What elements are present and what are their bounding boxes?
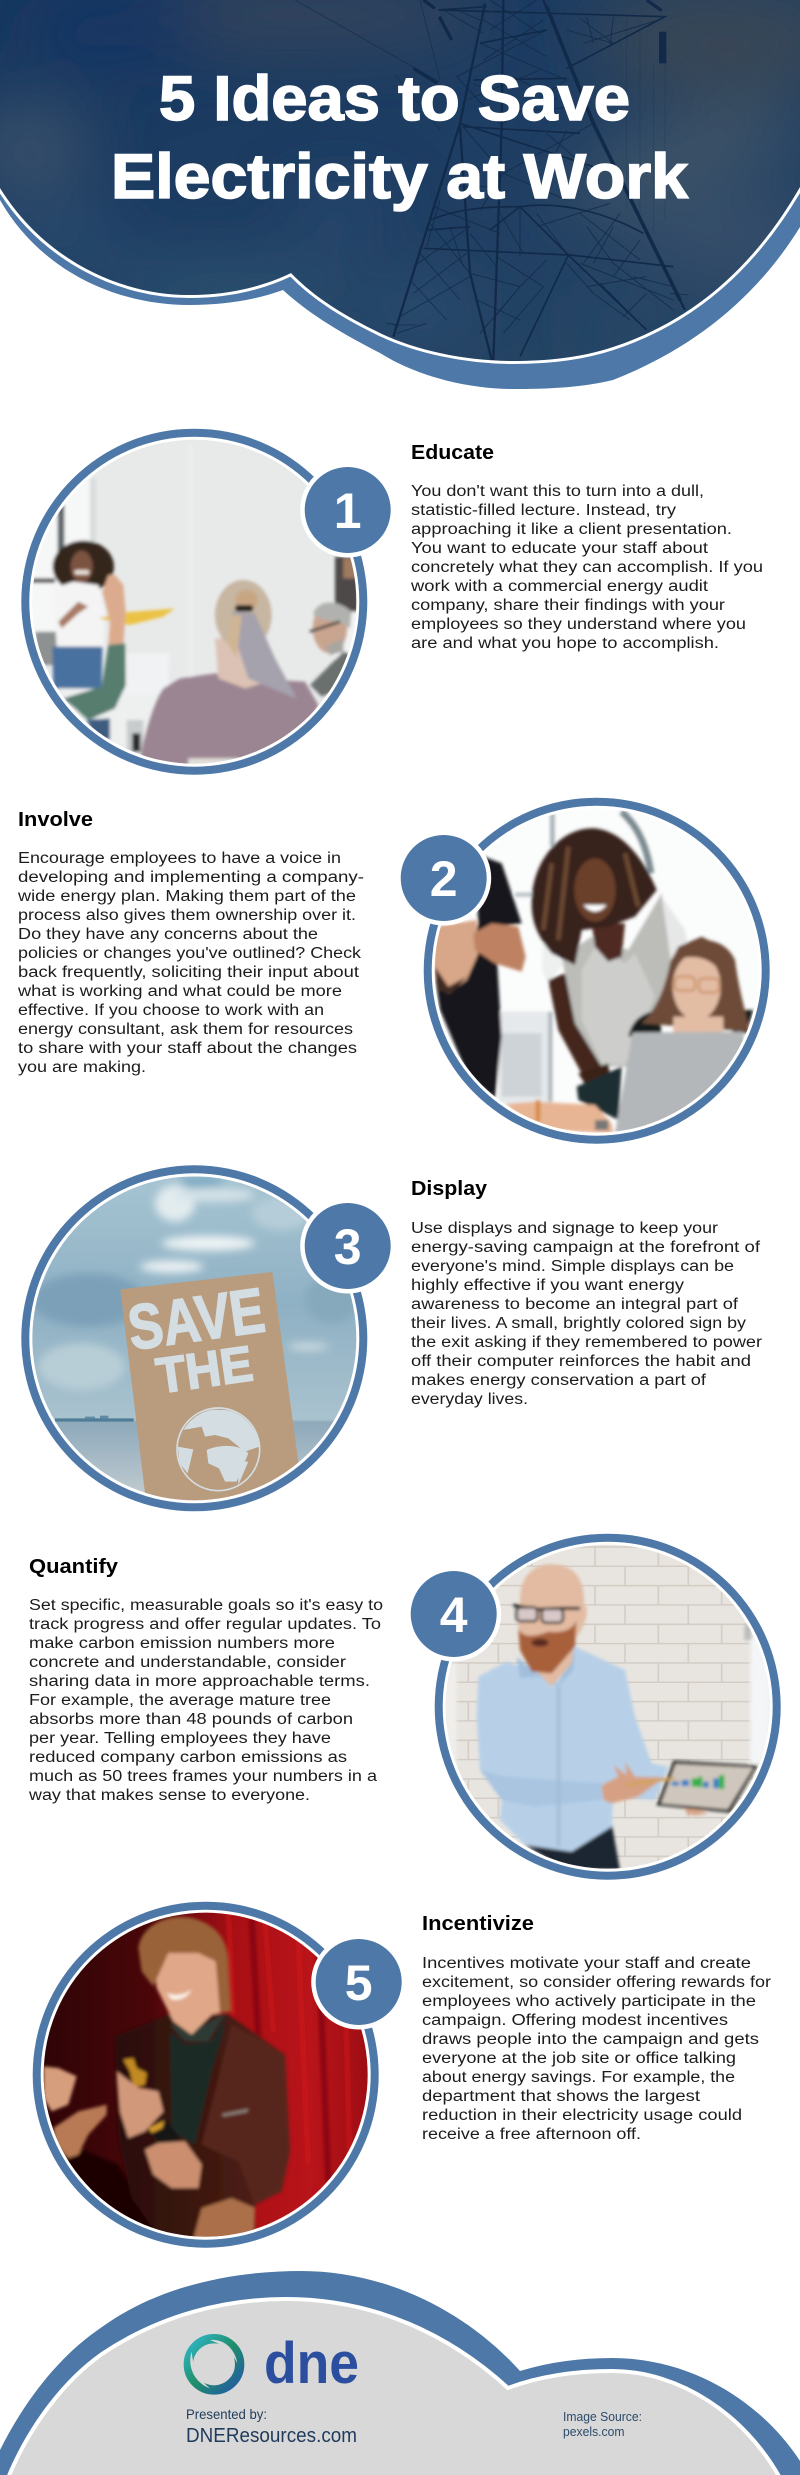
lattice [387, 0, 688, 333]
text: Educate body: approaching it like a client presentation. [411, 521, 732, 538]
text: Incentivize body: excitement, so consider offering rewards for [422, 1974, 771, 1991]
text: Quantify body: reduced company carbon emissions as [29, 1749, 347, 1766]
text: Quantify body [28, 1597, 383, 1804]
older man [310, 652, 355, 697]
text: Involve body: wide energy plan. Making them part of the [17, 888, 356, 905]
text: Display body: the exit asking if they remembered to power [411, 1334, 762, 1351]
text: Quantify body: For example, the average mature tree [29, 1692, 331, 1709]
badge 3 [300, 1198, 395, 1294]
glasses [513, 1605, 580, 1609]
text: Display body: highly effective if you want energy [411, 1277, 684, 1294]
hand [602, 1762, 665, 1803]
title [111, 64, 689, 212]
text: Incentivize body: everyone at the job site or office talking [422, 2050, 736, 2067]
insulators [413, 0, 662, 83]
tablet [657, 1761, 758, 1813]
trousers [525, 1823, 620, 1870]
yellow paper [98, 608, 175, 625]
photo: man with award statuette [44, 1912, 368, 2237]
text: Involve body: Encourage employees to have a voice in [18, 850, 341, 867]
text: Involve body: to share with your staff about the changes [18, 1040, 357, 1057]
sweater woman [139, 673, 318, 768]
text: Educate body: You don't want this to turn into a dull, [411, 483, 704, 500]
text: Quantify body: way that makes sense to everyone. [28, 1787, 310, 1804]
header blue band [0, 0, 800, 389]
text: Involve body: policies or changes you've outlined? Check [18, 945, 361, 962]
panel: idea 4 image [434, 1534, 781, 1880]
heading: Display: Display [411, 1178, 488, 1200]
photo: man presenting tablet [446, 1544, 770, 1869]
text: Display body: everyone's mind. Simple displays can be [411, 1258, 734, 1275]
presented by: DNEResources.com [186, 2425, 357, 2447]
text: Educate body: concretely what they can accomplish. If you [411, 559, 763, 576]
shirt [477, 1647, 668, 1852]
sign lettering: SAVE [124, 1276, 269, 1364]
text: Quantify body: concrete and understandable, consider [29, 1654, 346, 1671]
text: Display body: their lives. A small, brightly colored sign by [411, 1315, 746, 1332]
desk [58, 688, 162, 758]
logo: dne [264, 2331, 359, 2396]
badge 2: 2 [430, 851, 458, 907]
badge 1: 1 [334, 483, 362, 539]
laptop [126, 654, 169, 695]
text: Display body: awareness to become an integral part of [411, 1296, 739, 1313]
heading: Involve: Involve [18, 809, 93, 831]
text: Educate body: statistic-filled lecture. Instead, try [411, 502, 676, 519]
header banner [0, 0, 800, 400]
badge 4 [406, 1566, 501, 1662]
text: Display body [411, 1220, 762, 1408]
text: Involve body: back frequently, soliciting their input about [18, 964, 360, 981]
text: Quantify body: Set specific, measurable goals so it's easy to [29, 1597, 383, 1614]
heading: Educate: Educate [411, 442, 494, 464]
footer blue band [0, 2271, 800, 2475]
text: Incentivize body: about energy savings. For example, the [422, 2069, 735, 2086]
beard [518, 1620, 576, 1673]
panel: idea 3 image [15, 1165, 382, 1511]
header white outline [0, 0, 800, 361]
badge 5 [311, 1934, 406, 2030]
statuette & bottle [123, 2058, 147, 2088]
text: Incentivize body: reduction in their electricity usage could [422, 2107, 742, 2124]
header photo: transmission tower [0, 0, 800, 400]
shirt [170, 2013, 227, 2145]
footer grey shape [8, 2299, 780, 2475]
text: Incentivize body [422, 1955, 771, 2143]
jacket [115, 2013, 290, 2245]
footer panel [0, 2271, 800, 2475]
image source: Image Source: [563, 2410, 642, 2424]
cardboard sign [120, 1272, 298, 1507]
text: Involve body: what is working and what could be more [17, 983, 342, 1000]
sign lettering: THE [153, 1335, 256, 1404]
panel: idea 2 image [424, 798, 770, 1144]
badge 5: 5 [345, 1955, 373, 2011]
text: Display body: makes energy conservation a part of [411, 1372, 707, 1389]
head & hair [153, 1933, 228, 2035]
text: Educate body: are and what you hope to accomplish. [411, 635, 719, 652]
text: Involve body: energy consultant, ask them for resources [18, 1021, 353, 1038]
text: Educate body [410, 483, 763, 652]
image source [563, 2410, 642, 2439]
photo: three colleagues at laptop [434, 810, 754, 1133]
text: Quantify body: per year. Telling employees they have [29, 1730, 331, 1747]
image source: pexels.com [563, 2425, 624, 2439]
presented by [186, 2406, 357, 2447]
text: Involve body: effective. If you choose to work with an [18, 1002, 324, 1019]
hands [117, 2071, 163, 2138]
text: Incentivize body: department that shows the largest [422, 2088, 701, 2105]
text: Involve body [17, 850, 364, 1076]
presented by: Presented by: [186, 2406, 267, 2422]
badge 1 [300, 462, 395, 558]
text: Display body: off their computer reinforces the habit and [411, 1353, 751, 1370]
laptop [615, 1032, 745, 1133]
text: Incentivize body: draws people into the campaign and gets [422, 2031, 759, 2048]
text: Quantify body: track progress and offer regular updates. To [29, 1616, 381, 1633]
text: Involve body: process also gives them ownership over it. [18, 907, 356, 924]
panel: idea 5 image [25, 1898, 405, 2251]
text: Incentivize body: campaign. Offering modest incentives [422, 2012, 728, 2029]
text: Involve body: you are making. [18, 1059, 146, 1076]
heading: Quantify: Quantify [29, 1556, 119, 1578]
clapping hands [43, 2066, 77, 2111]
text: Display body: energy-saving campaign at the forefront of [411, 1239, 761, 1256]
badge 3: 3 [334, 1219, 362, 1275]
text: Display body: Use displays and signage to keep your [411, 1220, 718, 1237]
sign lettering [129, 1287, 266, 1393]
text: Incentivize body: Incentives motivate your staff and create [422, 1955, 751, 1972]
presenter [53, 541, 114, 593]
text: Quantify body: absorbs more than 48 pounds of carbon [29, 1711, 353, 1728]
text: Educate body: company, share their findings with your [411, 597, 725, 614]
head [518, 1564, 587, 1687]
text: Quantify body: much as 50 trees frames your numbers in a [29, 1768, 377, 1785]
logo ring [188, 2339, 240, 2390]
panel: idea 1 image [15, 425, 382, 778]
tower main legs [393, 0, 685, 360]
title: Electricity at Work [111, 142, 689, 212]
heading: Incentivize: Incentivize [422, 1913, 534, 1935]
badge 4: 4 [440, 1587, 468, 1643]
text: Display body: everyday lives. [411, 1391, 528, 1408]
globe [177, 1408, 260, 1491]
logo [188, 2331, 359, 2396]
text: Involve body: Do they have any concerns about the [18, 926, 318, 943]
text: Educate body: work with a commercial energy audit [410, 578, 709, 595]
text: Quantify body: sharing data in more approachable terms. [29, 1673, 370, 1690]
text: Educate body: employees so they understand where you [411, 616, 746, 633]
woman center body [542, 940, 563, 983]
wires [295, 0, 440, 130]
badge 2 [396, 830, 491, 926]
text: Quantify body: make carbon emission numbers more [29, 1635, 335, 1652]
text: Involve body: developing and implementing a company- [18, 869, 364, 886]
text: Incentivize body: employees who actively participate in the [422, 1993, 756, 2010]
man left [435, 853, 522, 1098]
woman right [628, 1010, 662, 1037]
photo: office presentation [32, 440, 356, 764]
raised arm [102, 575, 126, 645]
text: Educate body: You want to educate your staff about [411, 540, 709, 557]
title: 5 Ideas to Save [159, 64, 630, 134]
text: Incentivize body: receive a free afternoon off. [422, 2126, 641, 2143]
photo: save the earth sign [32, 1176, 356, 1500]
